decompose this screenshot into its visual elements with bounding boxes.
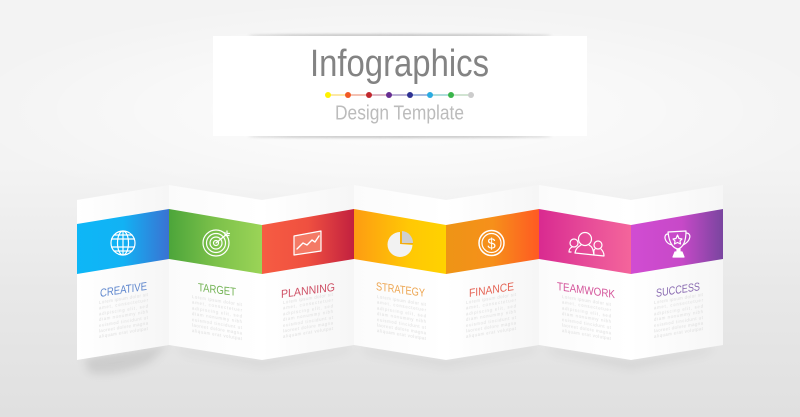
body text: creative: euismod tincidunt ut bbox=[99, 315, 149, 328]
body text: strategy bbox=[377, 294, 427, 341]
icon: dollar coin: $ bbox=[487, 236, 496, 252]
body text: planning: laoreet dolore magna bbox=[283, 320, 334, 333]
body text: planning: diam nonummy nibh bbox=[283, 309, 334, 322]
body text: planning: Lorem ipsum dolor sit bbox=[283, 292, 334, 305]
body text: strategy: amet, consectetuer bbox=[377, 300, 427, 313]
body text: target: amet, consectetuer bbox=[192, 300, 243, 313]
body text: teamwork bbox=[562, 294, 612, 341]
body text: planning: aliquam erat volutpat bbox=[283, 326, 334, 339]
body text: strategy: aliquam erat volutpat bbox=[377, 328, 427, 341]
body text: target: laoreet dolore magna bbox=[192, 323, 243, 336]
body text: creative: laoreet dolore magna bbox=[99, 320, 149, 333]
body text: finance: adipiscing elit, sed bbox=[466, 303, 517, 316]
body text: strategy: laoreet dolore magna bbox=[377, 323, 427, 336]
body text: success: amet, consectetuer bbox=[654, 298, 704, 311]
label: creative: CREATIVE bbox=[100, 281, 147, 300]
body text: success: Lorem ipsum dolor sit bbox=[654, 292, 704, 305]
body text: target bbox=[192, 294, 243, 341]
body text: success: adipiscing elit, sed bbox=[654, 303, 704, 316]
icon: chart bbox=[294, 231, 321, 255]
body text: creative: aliquam erat volutpat bbox=[99, 326, 149, 339]
body text: teamwork: euismod tincidunt ut bbox=[562, 317, 612, 330]
body text: planning: adipiscing elit, sed bbox=[283, 303, 334, 316]
icon: target bbox=[203, 230, 230, 256]
body text: planning: euismod tincidunt ut bbox=[283, 315, 334, 328]
body text: success: aliquam erat volutpat bbox=[654, 326, 704, 339]
panel: creative bbox=[77, 185, 169, 360]
body text: creative: amet, consectetuer bbox=[99, 298, 149, 311]
body text: creative: Lorem ipsum dolor sit bbox=[99, 292, 149, 305]
panel: planning bbox=[262, 185, 354, 360]
body text: success: laoreet dolore magna bbox=[654, 320, 704, 333]
body text: teamwork: amet, consectetuer bbox=[562, 300, 612, 313]
title card bbox=[213, 34, 587, 138]
body text: success: euismod tincidunt ut bbox=[654, 315, 704, 328]
body text: finance: aliquam erat volutpat bbox=[466, 326, 517, 339]
body text: teamwork: aliquam erat volutpat bbox=[562, 328, 612, 341]
panel: target bbox=[169, 185, 262, 360]
body text: finance bbox=[466, 292, 517, 339]
body text: teamwork: laoreet dolore magna bbox=[562, 323, 612, 336]
body text: finance: diam nonummy nibh bbox=[466, 309, 517, 322]
body text: finance: amet, consectetuer bbox=[466, 297, 517, 311]
panel: success bbox=[631, 185, 723, 360]
label: strategy: STRATEGY bbox=[376, 281, 425, 300]
body text: creative: diam nonummy nibh bbox=[99, 309, 149, 322]
body text: finance: laoreet dolore magna bbox=[466, 320, 517, 333]
body text: target: Lorem ipsum dolor sit bbox=[192, 294, 243, 307]
body text: strategy: Lorem ipsum dolor sit bbox=[377, 294, 427, 307]
body text: finance: euismod tincidunt ut bbox=[466, 315, 517, 328]
body text: teamwork: adipiscing elit, sed bbox=[562, 305, 612, 318]
body text: planning bbox=[283, 292, 334, 339]
title: Infographics bbox=[310, 43, 489, 85]
body text: success bbox=[654, 292, 704, 339]
body text: success: diam nonummy nibh bbox=[654, 309, 704, 322]
body text: strategy: diam nonummy nibh bbox=[377, 311, 427, 324]
label: planning: PLANNING bbox=[281, 282, 335, 301]
icon: pie chart bbox=[388, 231, 413, 257]
body text: strategy: adipiscing elit, sed bbox=[377, 305, 427, 318]
paper shadows bbox=[85, 344, 716, 374]
panel: finance bbox=[446, 185, 539, 360]
body text: target: aliquam erat volutpat bbox=[192, 328, 243, 341]
icon: team bbox=[569, 232, 604, 256]
label: finance: FINANCE bbox=[469, 281, 514, 300]
body text: creative: adipiscing elit, sed bbox=[99, 303, 149, 316]
body text: target: euismod tincidunt ut bbox=[192, 317, 243, 330]
body text: strategy: euismod tincidunt ut bbox=[377, 317, 427, 330]
label: teamwork: TEAMWORK bbox=[557, 281, 615, 301]
panel: strategy bbox=[354, 185, 446, 360]
label: success: SUCCESS bbox=[656, 281, 700, 300]
subtitle: Design Template bbox=[335, 102, 464, 124]
icon: trophy bbox=[665, 231, 690, 257]
icon: dollar coin bbox=[479, 230, 504, 256]
dotted timeline bbox=[325, 92, 474, 98]
body text: finance: Lorem ipsum dolor sit bbox=[466, 292, 517, 305]
body text: creative bbox=[99, 292, 149, 339]
body text: target: diam nonummy nibh bbox=[192, 311, 243, 324]
body text: target: adipiscing elit, sed bbox=[192, 305, 243, 319]
icon: globe bbox=[111, 231, 135, 255]
body text: teamwork: Lorem ipsum dolor sit bbox=[562, 294, 612, 307]
body text: teamwork: diam nonummy nibh bbox=[562, 311, 612, 324]
label: target: TARGET bbox=[198, 282, 236, 299]
body text: planning: amet, consectetuer bbox=[283, 297, 334, 311]
panel: teamwork bbox=[539, 185, 631, 360]
